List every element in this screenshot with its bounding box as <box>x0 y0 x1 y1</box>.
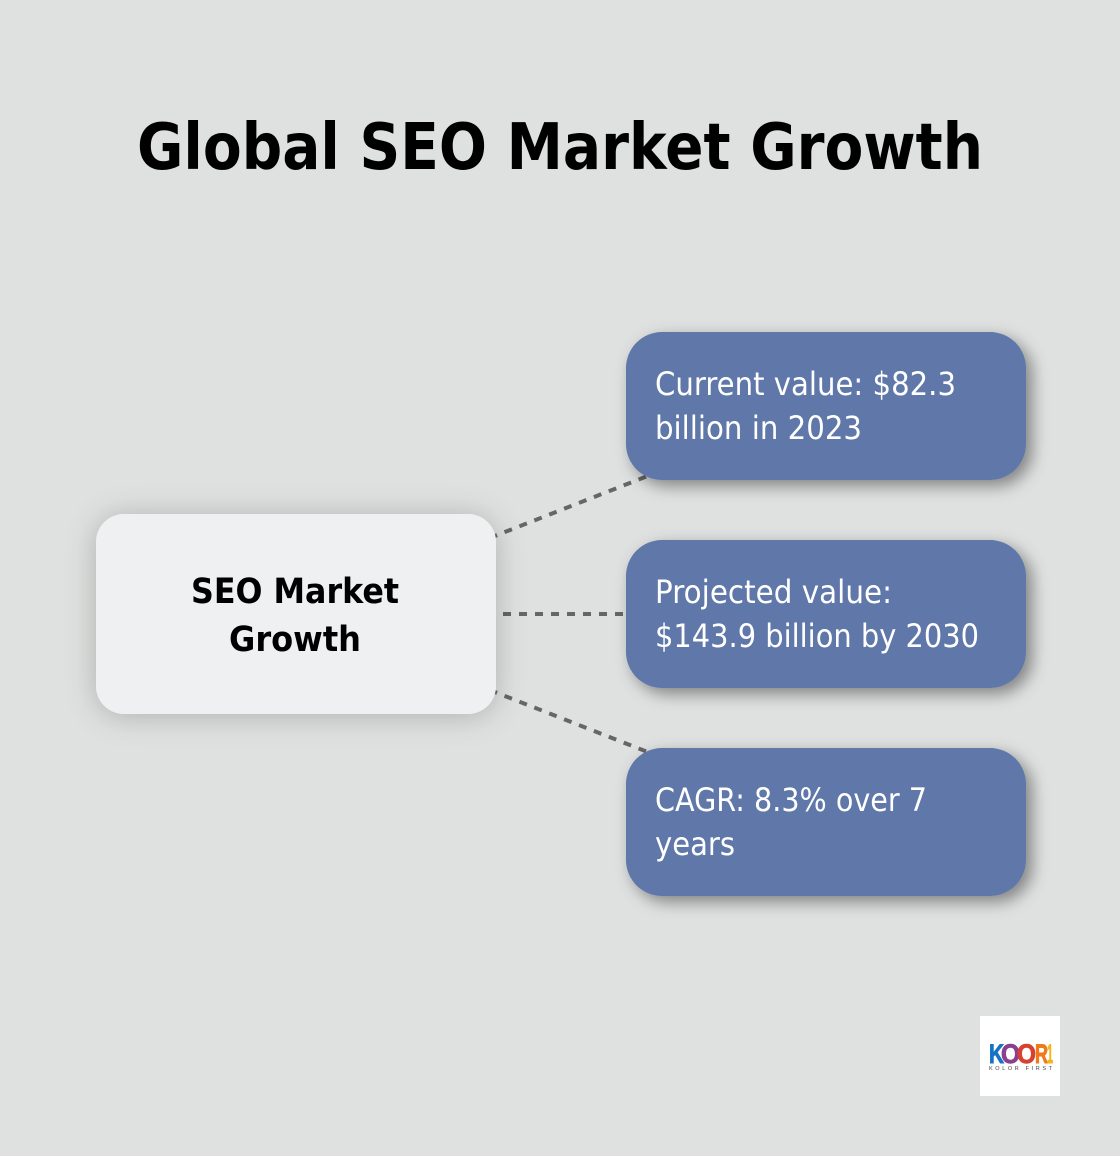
projected value text: Projected value: <box>655 573 892 611</box>
CAGR text: years <box>655 825 735 863</box>
panel: central node <box>96 514 496 714</box>
logo wordmark: K <box>989 1039 1004 1069</box>
connector: to CAGR <box>296 614 826 822</box>
central node label: Growth <box>229 620 361 660</box>
panel: CAGR <box>626 748 1026 896</box>
panel: current value <box>626 332 1026 480</box>
logo wordmark: O <box>1017 1039 1036 1069</box>
title: Global SEO Market Growth <box>137 111 983 185</box>
panel: projected value <box>626 540 1026 688</box>
connector: to projected value <box>295 612 826 616</box>
logo wordmark: R <box>1035 1039 1048 1069</box>
CAGR text: CAGR: 8.3% over 7 <box>655 781 927 819</box>
central node label: SEO Market <box>191 572 399 612</box>
connector: to current value <box>296 406 826 614</box>
logo: Koori: 1 <box>1047 1039 1053 1069</box>
current value text: billion in 2023 <box>655 409 862 447</box>
current value text: Current value: $82.3 <box>655 365 956 403</box>
logo: Koori <box>980 1016 1060 1096</box>
logo wordmark: O <box>1001 1039 1020 1069</box>
logo tagline: KOLOR FIRST <box>989 1066 1053 1072</box>
projected value text: $143.9 billion by 2030 <box>655 617 979 655</box>
